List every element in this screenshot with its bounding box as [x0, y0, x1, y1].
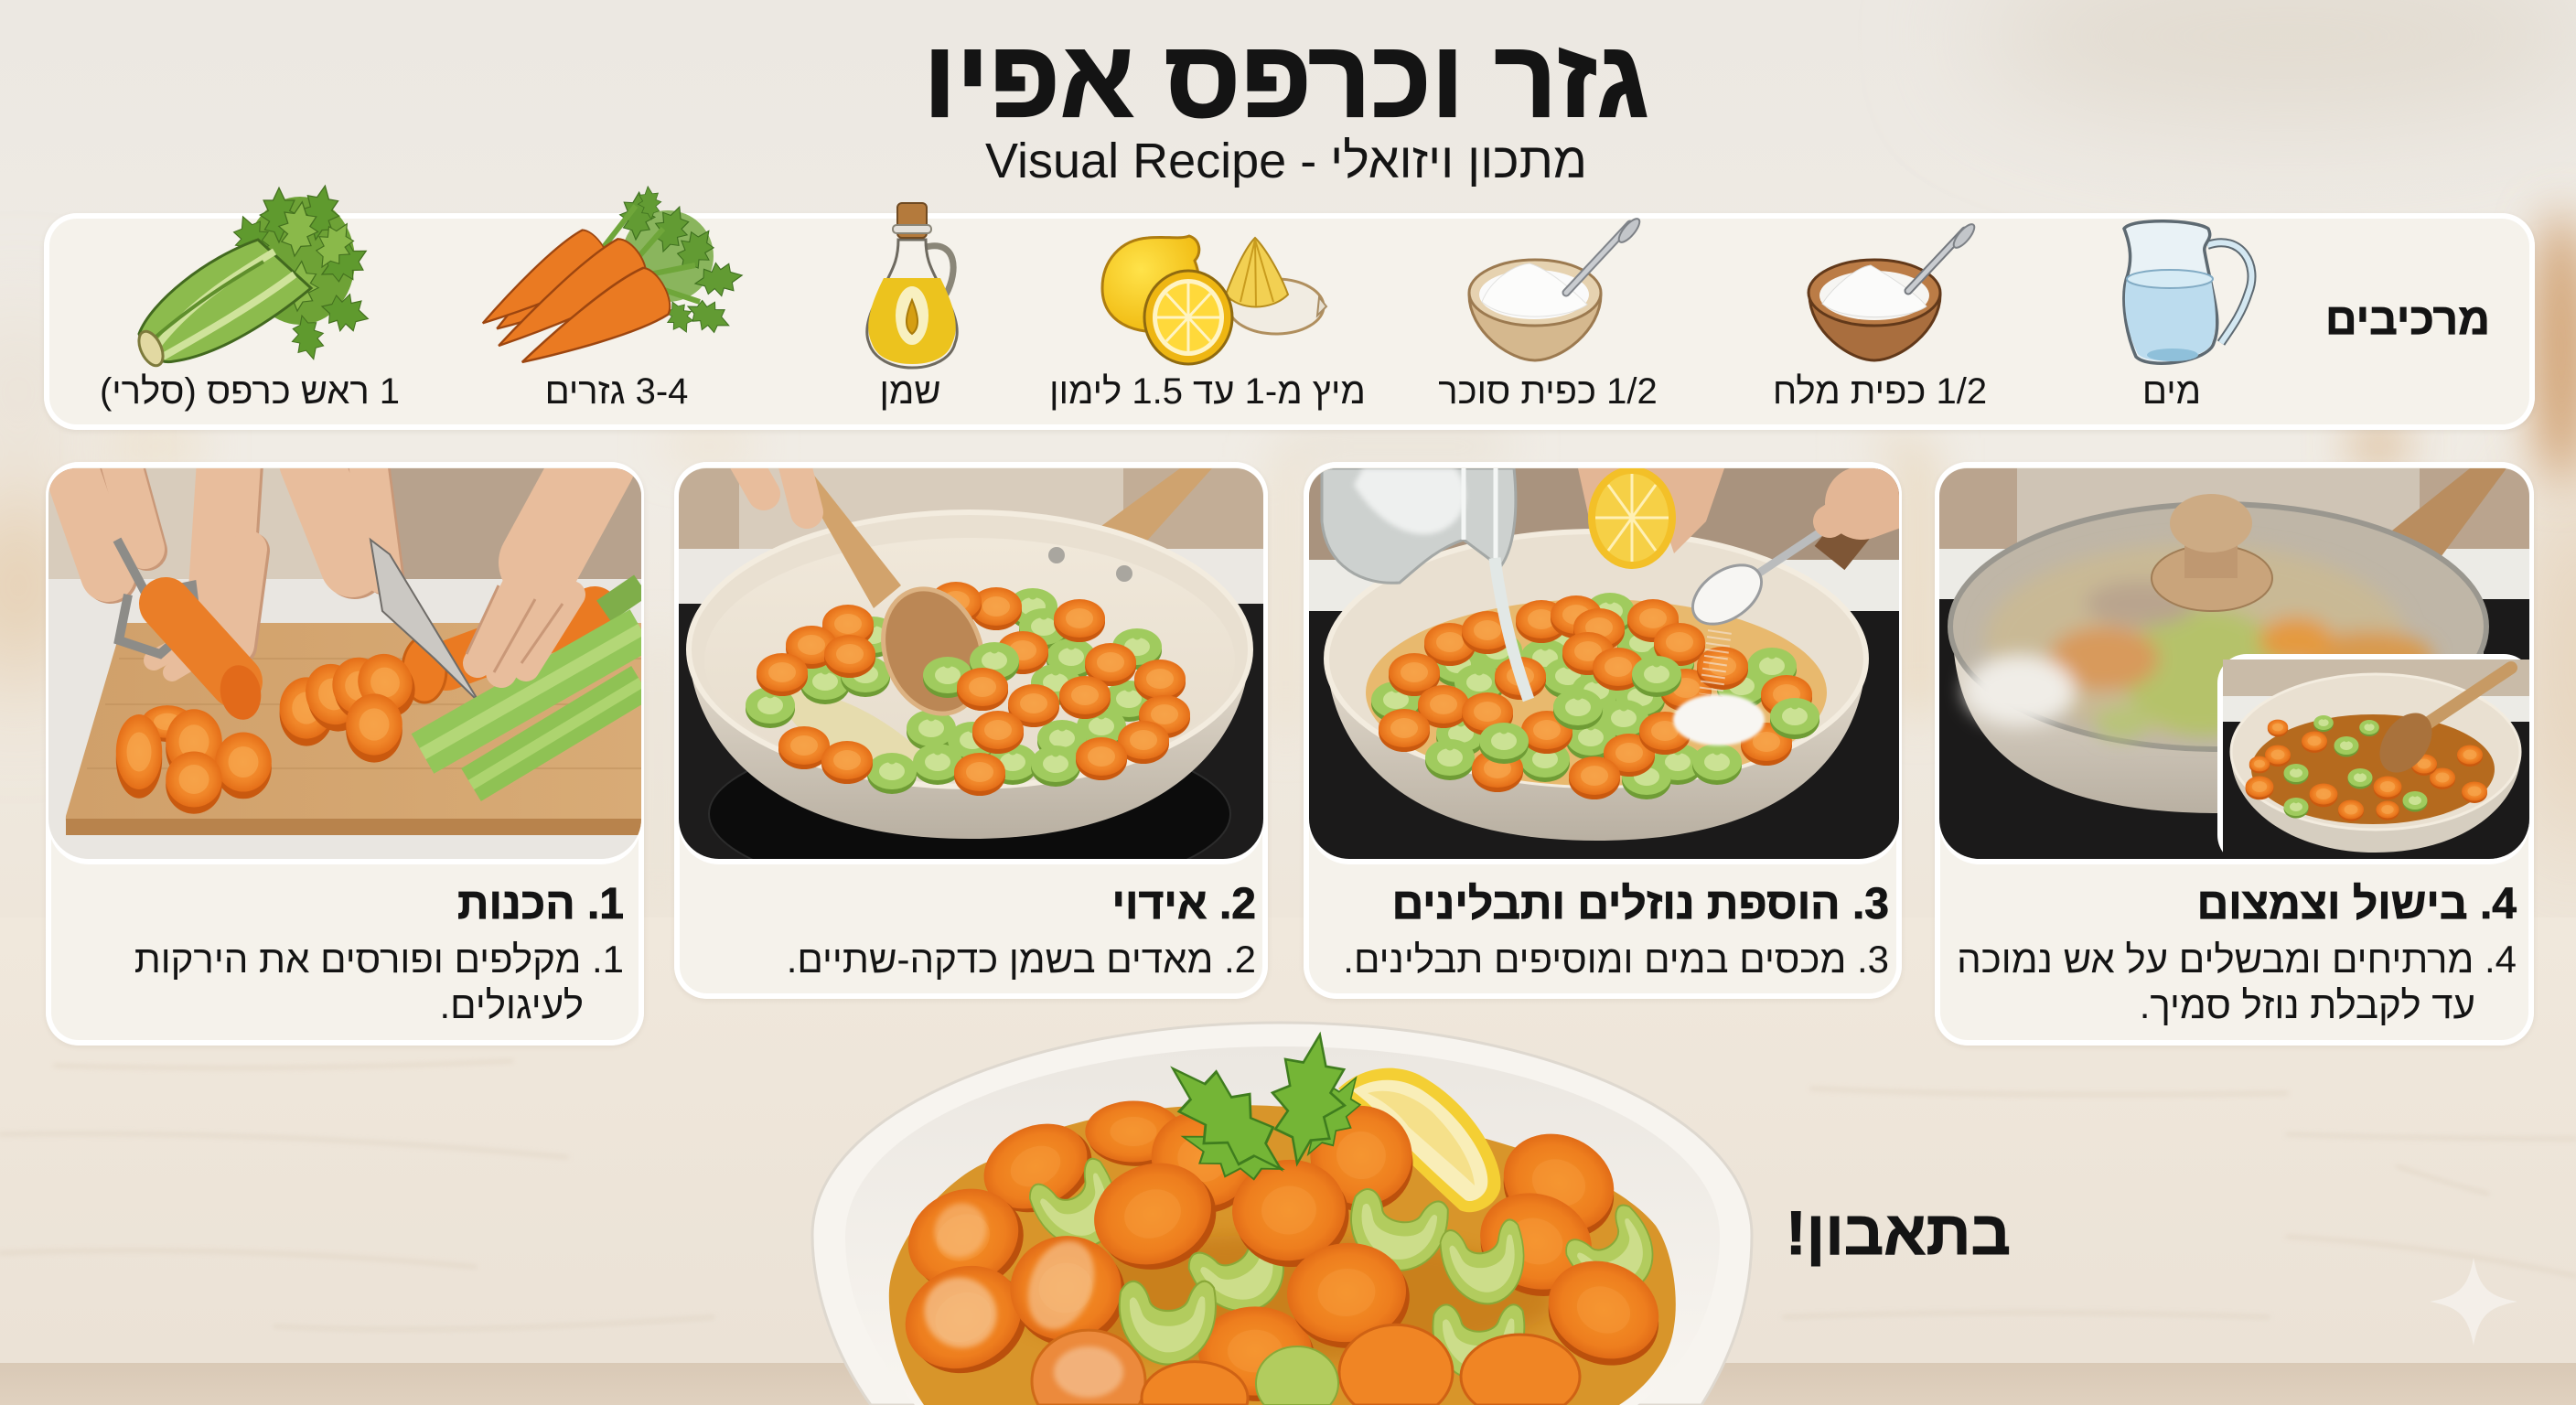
- step 1 text: [134, 938, 624, 1026]
- panel: step 2: [674, 462, 1268, 999]
- hands behind: [69, 462, 385, 672]
- title: גזר וכרפס אפיו: [923, 18, 1649, 140]
- step 3 heading: 3. הוספת נוזלים ותבלינים: [1392, 880, 1889, 928]
- vegetables: [746, 582, 1190, 796]
- lemon slice: [1338, 1068, 1500, 1212]
- carrot coins: [116, 645, 424, 814]
- carrot and celery pieces: [888, 1094, 1678, 1405]
- icon: salt bowl: [1809, 221, 1978, 360]
- parsley garnish: [1150, 1028, 1375, 1194]
- cutting hand: [478, 462, 595, 672]
- icon: sugar bowl: [1469, 216, 1643, 360]
- icon: carrots: [469, 185, 745, 386]
- wooden spoon and hand: [794, 468, 901, 608]
- step 3 photo: [1309, 468, 1899, 859]
- step 2 heading: 2. אידוי: [1111, 880, 1256, 928]
- panel: step 3: [1304, 462, 1902, 999]
- icon: oil bottle: [867, 203, 957, 368]
- lid knob: [2152, 545, 2272, 611]
- step 4 text: [1957, 938, 2517, 1026]
- label: carrots: 3-4 גזרים: [545, 371, 688, 412]
- ingredients heading: מרכיבים: [2325, 295, 2490, 344]
- label: sugar: 1/2 כפית סוכר: [1438, 371, 1658, 412]
- step 1 text: לעיגולים.: [439, 983, 584, 1026]
- panel: ingredients: [44, 213, 2535, 430]
- label: salt: 1/2 כפית מלח: [1773, 371, 1987, 412]
- subtitle: מתכון ויזואלי - Visual Recipe: [985, 134, 1587, 188]
- step 1 text: 1. מקלפים ופורסים את הירקות: [134, 938, 624, 981]
- salt pile: [1673, 694, 1765, 745]
- step 4 text: עד לקבלת נוזל סמיך.: [2140, 983, 2475, 1026]
- step 2 photo: [679, 468, 1263, 859]
- label: lemon: מיץ מ-1 עד 1.5 לימון: [1049, 371, 1366, 412]
- knife: [370, 540, 479, 702]
- lemon and hand: [1578, 468, 1724, 553]
- panel: step 4: [1935, 462, 2534, 1046]
- closing text: בתאבון!: [1786, 1198, 2011, 1268]
- celery sticks: [423, 629, 641, 754]
- label: oil: שמן: [879, 371, 941, 412]
- carrots: [166, 604, 236, 681]
- step 4 photo: [1939, 468, 2529, 859]
- step 1 heading: 1. הכנות: [457, 880, 624, 928]
- step 3 text: 3. מכסים במים ומוסיפים תבלינים.: [1343, 938, 1889, 981]
- step 2 text: 2. מאדים בשמן כדקה-שתיים.: [787, 938, 1256, 981]
- step 4 heading: 4. בישול וצמצום: [2197, 880, 2517, 928]
- peeler: [117, 540, 197, 654]
- water jug and stream: [1322, 468, 1516, 583]
- spoon and hand: [1733, 526, 1830, 590]
- finished dish bowl: [810, 1021, 1753, 1405]
- label: celery: 1 ראש כרפס (סלרי): [100, 371, 400, 412]
- label: water: מים: [2142, 371, 2201, 412]
- inset: finished sauce: [2217, 654, 2533, 864]
- icon: water pitcher: [2124, 221, 2251, 363]
- step 4 text: 4. מרתיחים ומבשלים על אש נמוכה: [1957, 938, 2517, 981]
- icon: lemons and juicer: [1102, 236, 1326, 364]
- icon: sparkle: [2431, 1259, 2517, 1345]
- icon: celery: [134, 182, 375, 370]
- panel: step 1: [46, 462, 644, 1046]
- step 1 photo: [48, 468, 641, 859]
- glass lid: [1950, 504, 2486, 749]
